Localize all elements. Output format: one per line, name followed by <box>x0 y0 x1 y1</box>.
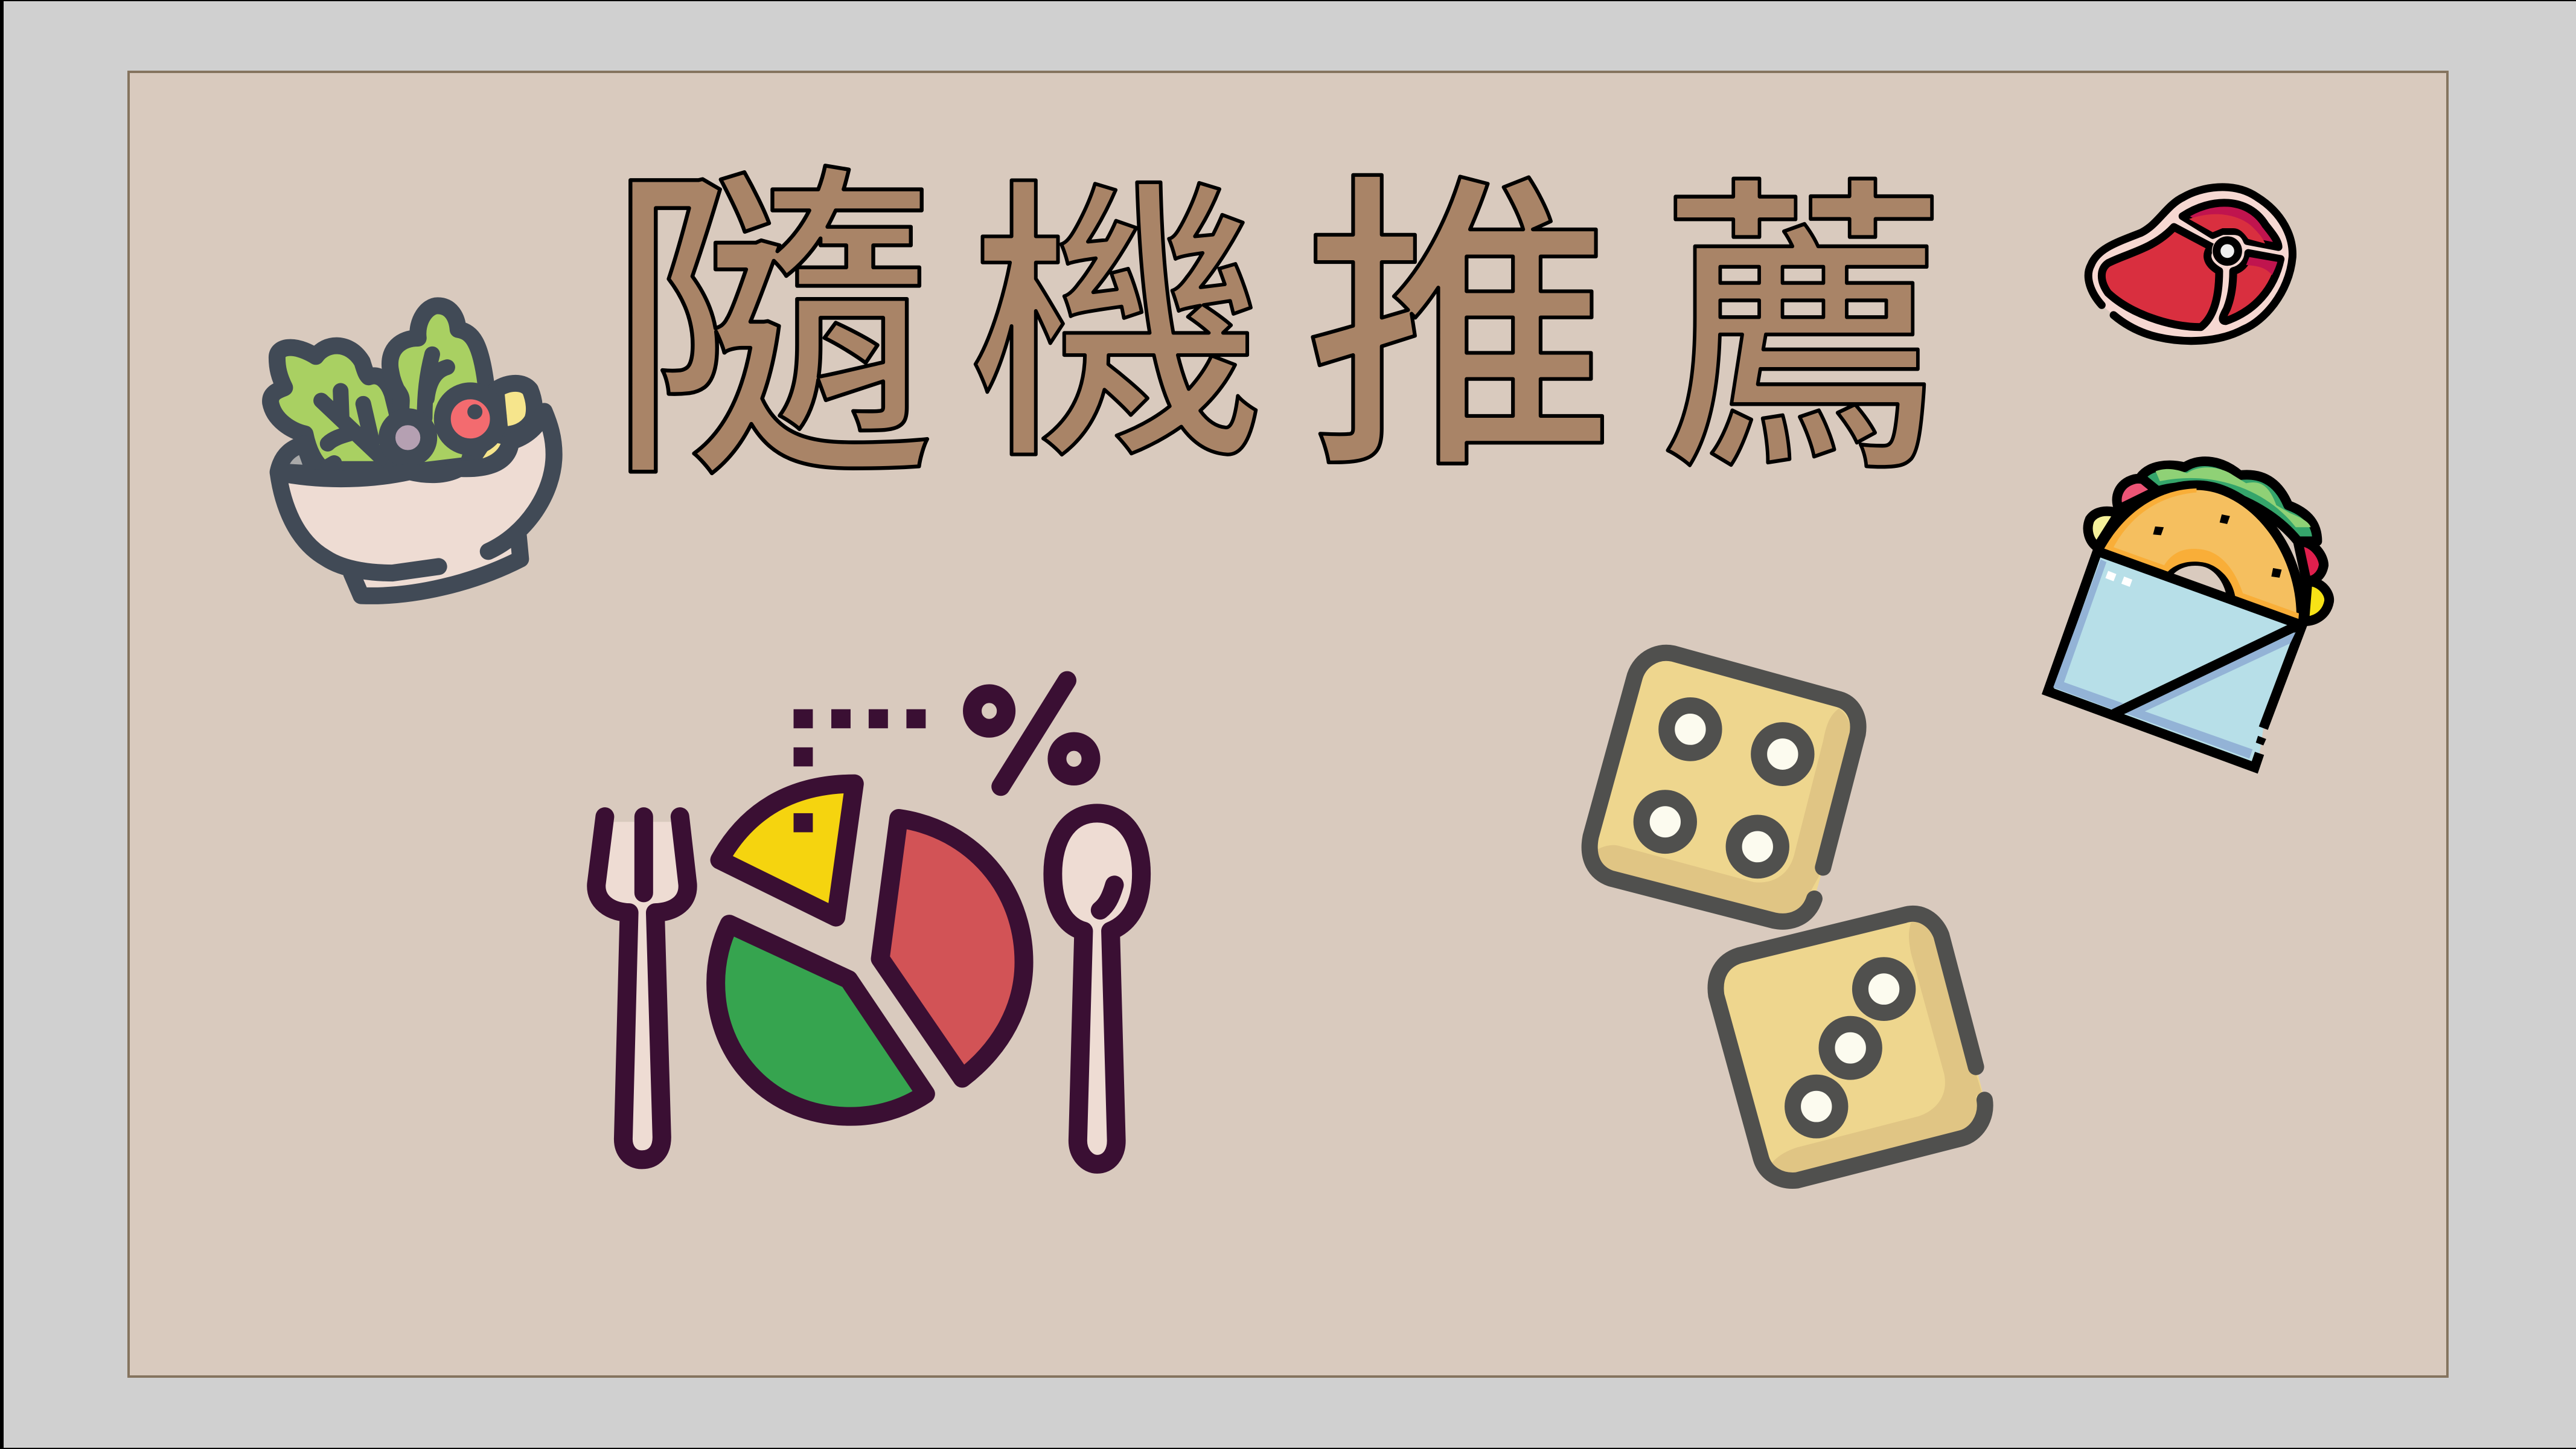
yellow pepper <box>496 383 534 435</box>
die with four pips <box>1590 653 1858 921</box>
tomato <box>443 391 499 447</box>
icon: salad bowl <box>270 305 554 596</box>
steak main cut <box>2101 227 2219 327</box>
dotted leader line <box>794 709 925 832</box>
icon: steak <box>2088 187 2292 341</box>
title: 薦 <box>1661 160 1948 507</box>
steak upper cut <box>2182 203 2278 247</box>
steak bone <box>2212 236 2243 266</box>
fork <box>596 817 688 1160</box>
title <box>607 147 1948 515</box>
bowl outline <box>278 411 554 596</box>
tomato left <box>2117 479 2160 509</box>
tomato right <box>2298 541 2324 581</box>
steak fat <box>2088 187 2292 341</box>
yellow filling left <box>2088 511 2119 547</box>
title: 推 <box>1304 156 1615 504</box>
grey piece <box>278 444 315 474</box>
wrapper <box>2048 551 2302 767</box>
yellow filling right <box>2304 581 2329 621</box>
icon: pie chart with cutlery <box>596 680 1142 1164</box>
bowl body <box>278 411 554 595</box>
spoon <box>1053 813 1142 1164</box>
leaf veins <box>321 354 447 471</box>
pie slice: yellow <box>720 784 854 917</box>
olive <box>387 417 429 459</box>
wrapper shadow right <box>2123 632 2296 758</box>
steak lower cut <box>2223 253 2281 321</box>
tortilla seeds <box>2153 514 2281 578</box>
tortilla <box>2100 485 2301 625</box>
wrapper shadow left <box>2053 559 2123 709</box>
wrapper gap dash <box>2256 736 2266 746</box>
tomato highlight <box>467 405 482 420</box>
wrapper fold <box>2115 625 2298 714</box>
pie slice: red <box>880 819 1024 1078</box>
pie slice: green <box>716 924 925 1116</box>
icon: dice <box>1590 653 1985 1180</box>
lettuce <box>2141 461 2317 541</box>
right lettuce leaf <box>390 305 486 472</box>
die with three pips <box>1716 913 1985 1180</box>
icon: burrito <box>2048 461 2329 767</box>
percent sign <box>973 680 1091 787</box>
wrapper highlights <box>2105 571 2132 587</box>
left lettuce leaf <box>270 346 399 470</box>
title: 隨 <box>607 147 936 515</box>
title: 機 <box>969 162 1265 493</box>
yellow slice <box>465 433 511 469</box>
